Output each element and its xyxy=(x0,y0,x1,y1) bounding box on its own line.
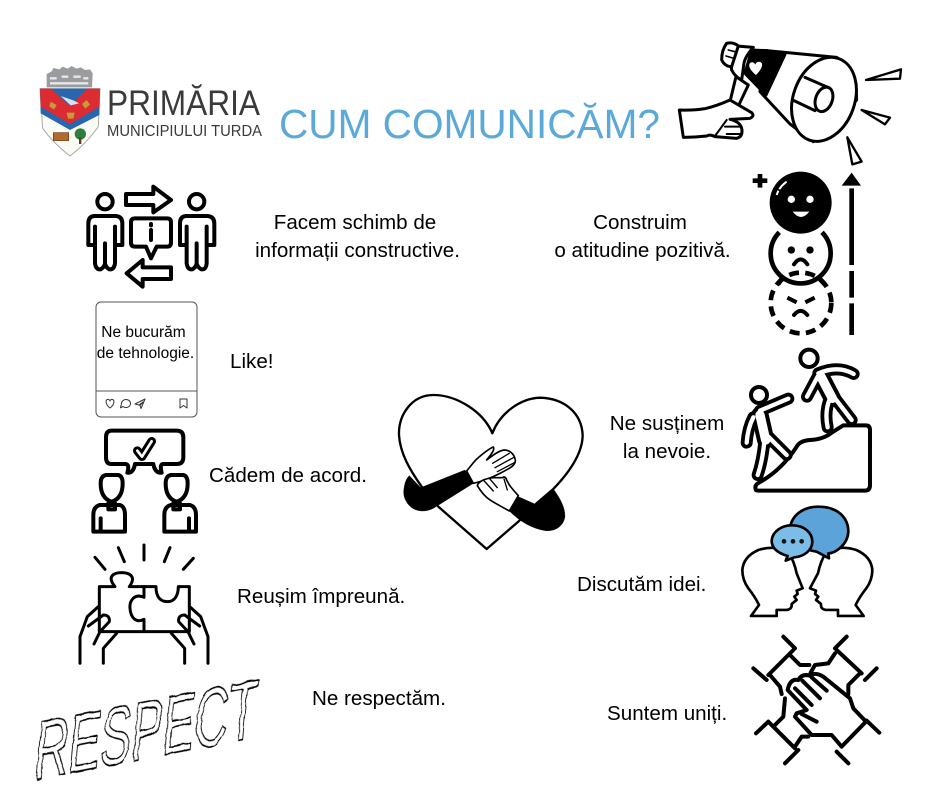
panel: social media post xyxy=(96,302,197,417)
icon: megaphone held by hand xyxy=(679,43,901,164)
title: CUM COMUNICĂM? xyxy=(279,101,660,147)
text: discussing ideas: Discutăm idei. xyxy=(577,573,706,596)
text: positive attitude: Construim xyxy=(593,211,687,234)
icon: heads with speech bubbles xyxy=(742,507,872,616)
icon: two people agreeing xyxy=(93,431,196,532)
text: information exchange: informații constructive. xyxy=(255,239,460,262)
icon: faces with rising arrow xyxy=(753,172,861,335)
text: being united: Suntem uniți. xyxy=(607,702,727,725)
icon: heart hugged by arms xyxy=(399,395,583,549)
text: mutual support: Ne susținem xyxy=(610,412,724,435)
logo: Primăria Municipiului Turda xyxy=(40,66,262,156)
logo subtitle: MUNICIPIULUI TURDA xyxy=(107,123,262,140)
post text: de tehnologie. xyxy=(97,345,194,362)
text: like: Like! xyxy=(230,350,274,373)
text: information exchange: Facem schimb de xyxy=(274,211,436,234)
icon: joined hands xyxy=(753,637,879,763)
icon: information exchange xyxy=(88,187,214,287)
icon: hands holding puzzle pieces xyxy=(80,545,208,663)
text: respect: Ne respectăm. xyxy=(312,687,446,710)
text: succeed together: Reușim împreună. xyxy=(237,585,405,608)
logo name: PRIMĂRIA xyxy=(107,84,261,123)
icon: climbers helping each other xyxy=(747,350,870,491)
post text: Ne bucurăm xyxy=(101,324,186,341)
text: agreement: Cădem de acord. xyxy=(209,464,367,487)
text: mutual support: la nevoie. xyxy=(623,440,711,463)
post action icons xyxy=(106,399,187,408)
text: positive attitude: o atitudine pozitivă. xyxy=(554,239,731,262)
icon: coat of arms xyxy=(40,66,100,156)
